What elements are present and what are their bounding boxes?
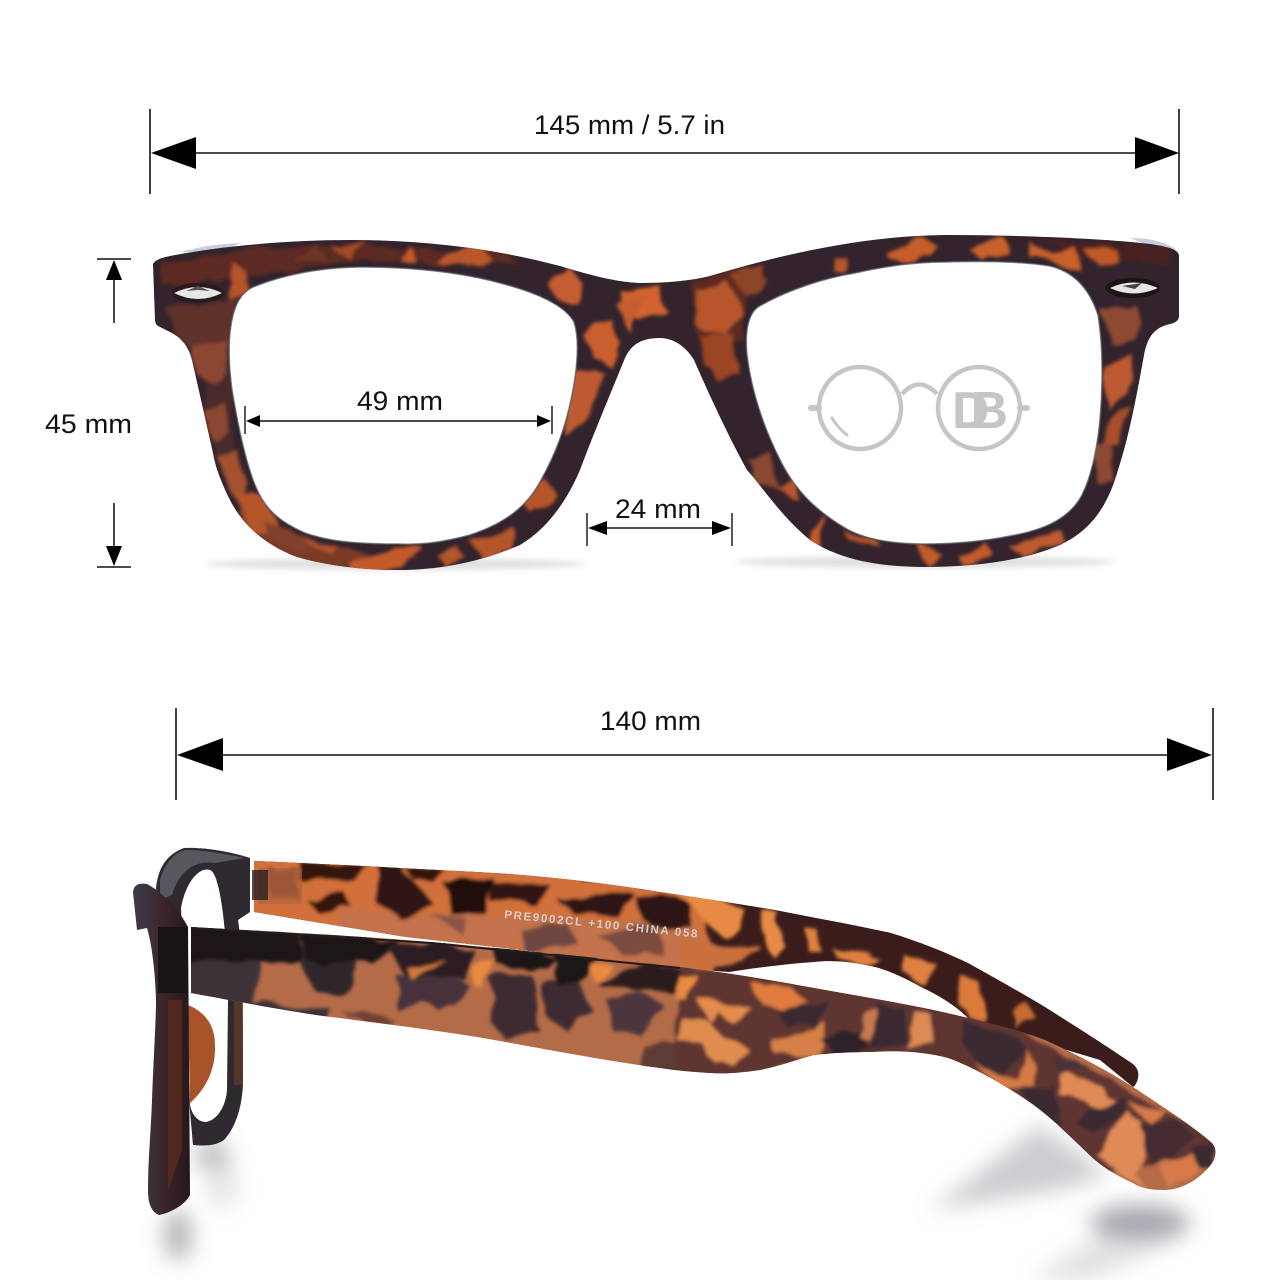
near temple arm	[180, 920, 1225, 1200]
shadow: front frame left lens	[205, 558, 585, 570]
bridge and right side spots	[695, 285, 745, 335]
left rivet	[172, 283, 224, 303]
dimension: overall width 145 mm: 145 mm / 5.7 in	[534, 110, 725, 140]
right rivet	[1106, 278, 1160, 298]
far rim brown right edge	[234, 1000, 243, 1085]
dimension: lens width 49 mm: 49 mm	[357, 386, 443, 416]
glossy dark top band	[180, 925, 300, 962]
dimension: bridge width 24 mm: 24 mm	[615, 494, 701, 524]
dark spots	[300, 862, 365, 880]
left dark section	[191, 927, 264, 1004]
frame highlights at the top corners	[180, 238, 1177, 252]
logo left circle	[819, 367, 901, 449]
front view of glasses	[150, 230, 1185, 575]
logo on right lens	[811, 367, 1027, 449]
temple engraving: PRE9002CL +100 CHINA 058	[504, 909, 699, 941]
far temple arm	[254, 861, 1138, 1087]
nose pad	[188, 1005, 215, 1103]
near rim end block	[158, 927, 188, 993]
hinge detail	[252, 868, 302, 904]
orange spots right part	[675, 895, 745, 935]
side view of glasses	[133, 848, 1225, 1215]
broad brown zones	[160, 245, 520, 285]
logo bridge	[902, 384, 937, 394]
right lens rim	[746, 261, 1102, 544]
dimension: temple length 140 mm	[176, 706, 1213, 800]
near rim of frame	[133, 884, 190, 1215]
logo lens glint	[832, 418, 847, 435]
dimension: temple length 140 mm: 140 mm	[600, 706, 701, 736]
dimension: lens width 49 mm	[245, 386, 552, 434]
dimension: lens height 45 mm: 45 mm	[45, 409, 132, 439]
logo right circle	[938, 367, 1020, 449]
ground shadows under side view	[164, 1125, 1190, 1280]
right section base	[670, 965, 1225, 1175]
far rim highlight	[160, 850, 245, 900]
tortoise shell frame	[150, 230, 1185, 575]
logo temple stubs	[811, 405, 1027, 411]
near rim brown core	[168, 1000, 182, 1190]
left lens rim	[229, 267, 577, 544]
dimension: overall width 145 mm	[150, 109, 1179, 194]
far rim	[156, 848, 250, 1145]
shadow: front frame right lens	[735, 556, 1115, 568]
logo letters DB: DB	[952, 382, 1008, 440]
dimension: lens height 45 mm	[45, 259, 132, 567]
left side spots	[190, 342, 228, 382]
near temple top edge highlight	[191, 928, 680, 968]
dimension: bridge width 24 mm	[587, 494, 732, 546]
